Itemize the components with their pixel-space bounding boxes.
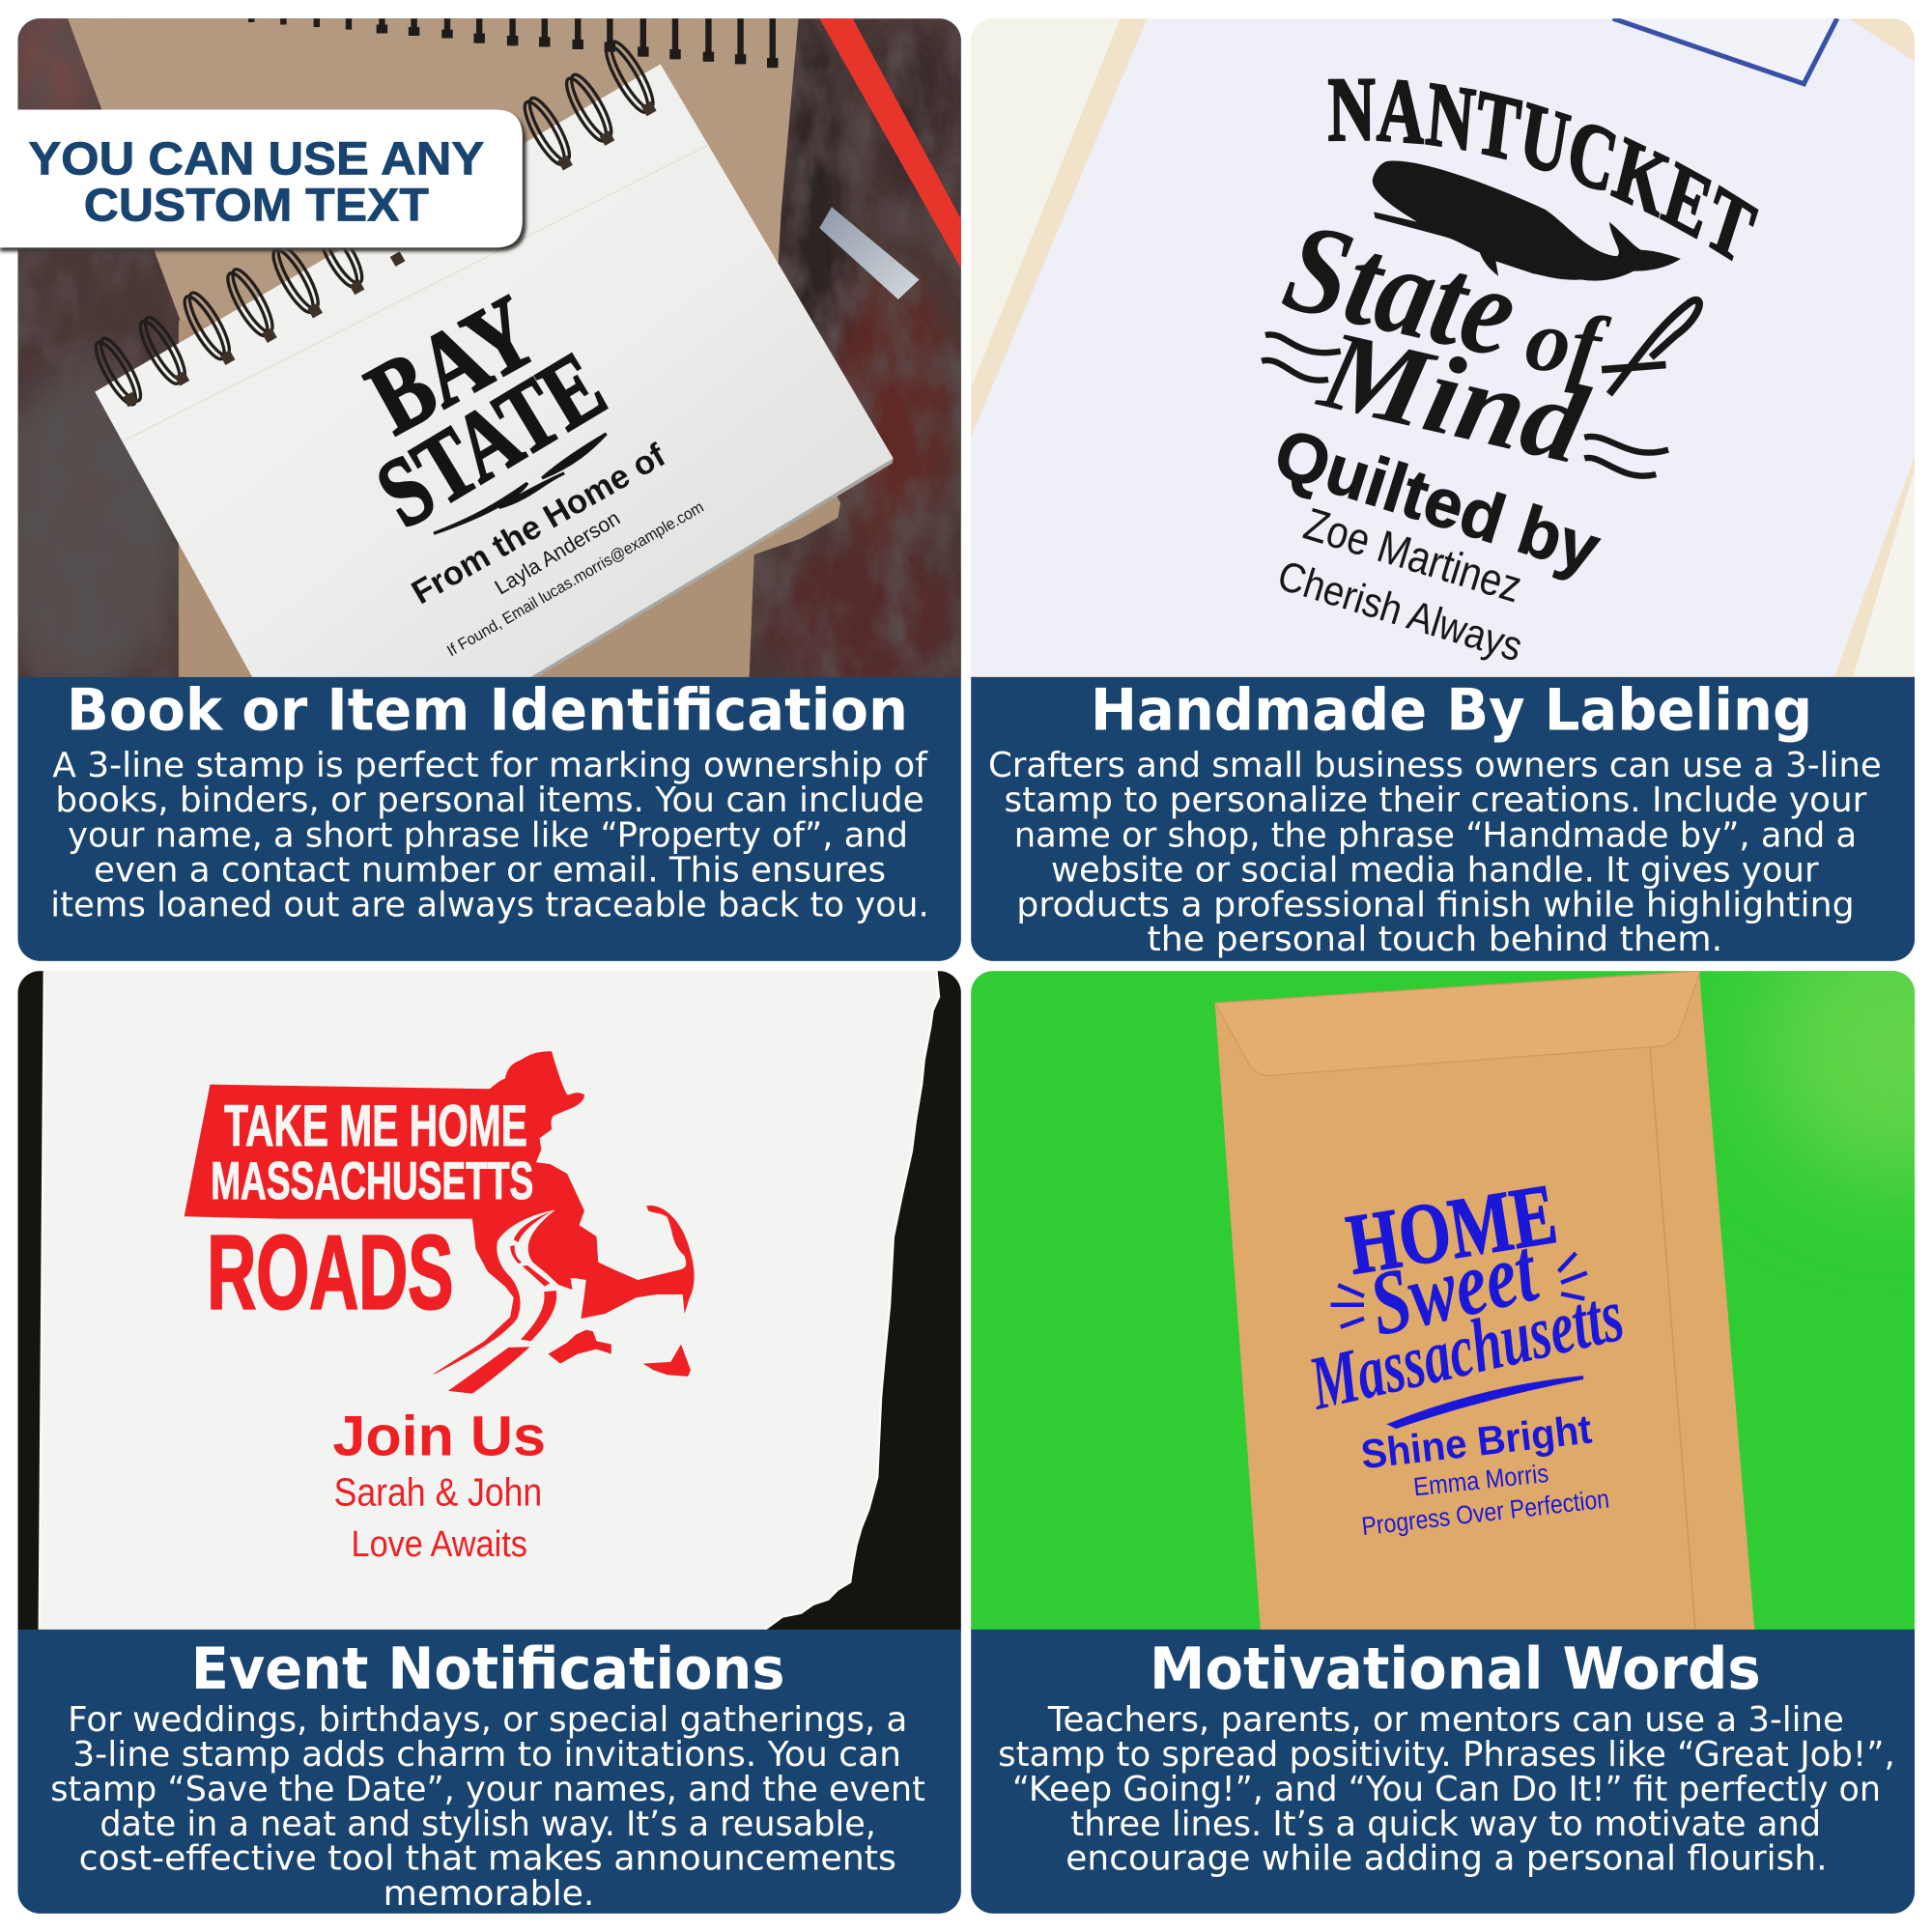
body text bbox=[998, 1700, 1895, 1879]
photo: torn white paper on black bbox=[17, 971, 961, 1632]
body text: items loaned out are always traceable back to you. bbox=[50, 885, 929, 924]
front spiral rings bbox=[90, 37, 660, 410]
body text bbox=[50, 746, 929, 924]
stamp text: TAKE ME HOME bbox=[224, 1094, 527, 1158]
stamp: Home Sweet Massachusetts: Progress Over Perfection bbox=[1360, 1484, 1610, 1541]
body text: stamp to personalize their creations. Include your bbox=[1005, 781, 1867, 820]
body text: encourage while adding a personal flourish. bbox=[1065, 1839, 1828, 1879]
body text: cost-effective tool that makes announcements bbox=[79, 1839, 896, 1879]
caption panel bbox=[17, 677, 961, 962]
body text: even a contact number or email. This ensures bbox=[94, 851, 886, 891]
body text: Crafters and small business owners can use a 3-line bbox=[988, 746, 1882, 785]
stamp: Home Sweet Massachusetts: Emma Morris bbox=[1412, 1459, 1549, 1501]
stamp: Home Sweet Massachusetts bbox=[1311, 1185, 1623, 1536]
stamp: Home Sweet Massachusetts: Sweet bbox=[1361, 1220, 1548, 1355]
road bbox=[437, 1209, 586, 1374]
stamp impression: Bay State: If Found, Email lucas.morris@example.com bbox=[443, 497, 707, 660]
red pen bbox=[819, 18, 961, 269]
stamp: Nantucket: Quilted by bbox=[1265, 414, 1608, 588]
body text: name or shop, the phrase “Handmade by”, and a bbox=[1014, 815, 1857, 855]
stamp: Nantucket: Mind bbox=[1308, 306, 1599, 489]
back spiral rings bbox=[251, 18, 773, 68]
body text: books, binders, or personal items. You can include bbox=[55, 781, 924, 820]
stamp text bbox=[207, 1094, 546, 1565]
back kraft notebook bbox=[68, 18, 840, 678]
stamp text: Join Us bbox=[332, 1405, 546, 1467]
stamp: Nantucket: State bbox=[1272, 194, 1529, 384]
icon: whale bbox=[1373, 161, 1681, 281]
body text: A 3-line stamp is perfect for marking ownership of bbox=[52, 746, 928, 785]
panel: Event Notifications bbox=[17, 971, 961, 1915]
callout: you can use any custom text bbox=[0, 110, 526, 251]
panel: Book or Item Identification bbox=[0, 0, 961, 962]
stamp: Nantucket: Zoe Martinez bbox=[1298, 498, 1527, 613]
stamp: Home Sweet Massachusetts: HOME bbox=[1341, 1166, 1563, 1293]
heading: Book or Item Identification bbox=[67, 677, 908, 745]
body text: three lines. It’s a quick way to motivate and bbox=[1070, 1804, 1821, 1844]
body text: stamp “Save the Date”, your names, and the event bbox=[50, 1770, 925, 1809]
islands bbox=[548, 1330, 691, 1377]
clear cap bbox=[819, 207, 920, 299]
body text: “Keep Going!”, and “You Can Do It!” fit perfectly on bbox=[1012, 1770, 1881, 1809]
stamp text: Sarah & John bbox=[334, 1470, 542, 1515]
body text bbox=[988, 746, 1882, 959]
caption panel bbox=[17, 1630, 961, 1915]
photo: kraft envelope on green bbox=[971, 912, 1932, 1632]
photo: notebook on dark textured table bbox=[0, 0, 961, 690]
body text: the personal touch behind them. bbox=[1148, 920, 1722, 959]
body text: products a professional finish while highlighting bbox=[1016, 885, 1855, 924]
stamp text: ROADS bbox=[207, 1214, 453, 1331]
heading: Handmade By Labeling bbox=[1091, 677, 1812, 745]
body text: 3-line stamp adds charm to invitations. You can bbox=[72, 1735, 901, 1775]
stamp: Nantucket: NANTUCKET bbox=[1327, 78, 1759, 261]
body text: your name, a short phrase like “Property of”, and bbox=[68, 815, 908, 855]
stamp: Home Sweet Massachusetts: Massachusetts bbox=[1301, 1273, 1631, 1427]
stamp: Home Sweet Massachusetts: Shine Bright bbox=[1358, 1406, 1594, 1477]
body text bbox=[50, 1700, 925, 1914]
body text: Teachers, parents, or mentors can use a 3-line bbox=[1047, 1700, 1844, 1740]
body text: date in a neat and stylish way. It’s a reusable, bbox=[99, 1804, 876, 1844]
stamp: Massachusetts map bbox=[185, 1051, 695, 1396]
stamp: Nantucket bbox=[1261, 78, 1759, 661]
body text: memorable. bbox=[384, 1874, 594, 1914]
body text: website or social media handle. It gives your bbox=[1051, 851, 1819, 891]
callout: you can use any custom text: YOU CAN USE ANY bbox=[28, 132, 484, 185]
stamp impression: Bay State: Layla Anderson bbox=[491, 505, 624, 599]
stamp impression: Bay State: From the Home of bbox=[406, 437, 672, 611]
white notebook page bbox=[95, 64, 894, 678]
body text: stamp to spread positivity. Phrases like “Great Job!”, bbox=[998, 1735, 1895, 1775]
stamp text: Love Awaits bbox=[352, 1523, 527, 1565]
stamp: Nantucket: Cherish Always bbox=[1272, 553, 1527, 670]
heading: Event Notifications bbox=[191, 1635, 784, 1703]
stamp impression: Bay State: STATE bbox=[359, 331, 623, 549]
panel: Handmade By Labeling bbox=[971, 18, 1915, 961]
body text: For weddings, birthdays, or special gatherings, a bbox=[68, 1700, 907, 1740]
stamp: Nantucket: of bbox=[1520, 289, 1615, 398]
stamp impression: Bay State: BAY bbox=[351, 274, 554, 457]
photo: stamped sheet on clipboard bbox=[971, 18, 1915, 678]
panel: Motivational Words bbox=[971, 912, 1932, 1915]
caption panel bbox=[971, 677, 1915, 962]
stamp text: MASSACHUSETTS bbox=[211, 1151, 533, 1210]
caption panel bbox=[971, 1630, 1915, 1915]
heading: Motivational Words bbox=[1150, 1635, 1761, 1703]
blue clip bbox=[1613, 18, 1837, 84]
stamp impression: Bay State bbox=[351, 274, 707, 660]
envelope flap bbox=[1215, 971, 1700, 1076]
callout: you can use any custom text: CUSTOM TEXT bbox=[84, 179, 429, 231]
ring tabs bbox=[123, 101, 657, 407]
